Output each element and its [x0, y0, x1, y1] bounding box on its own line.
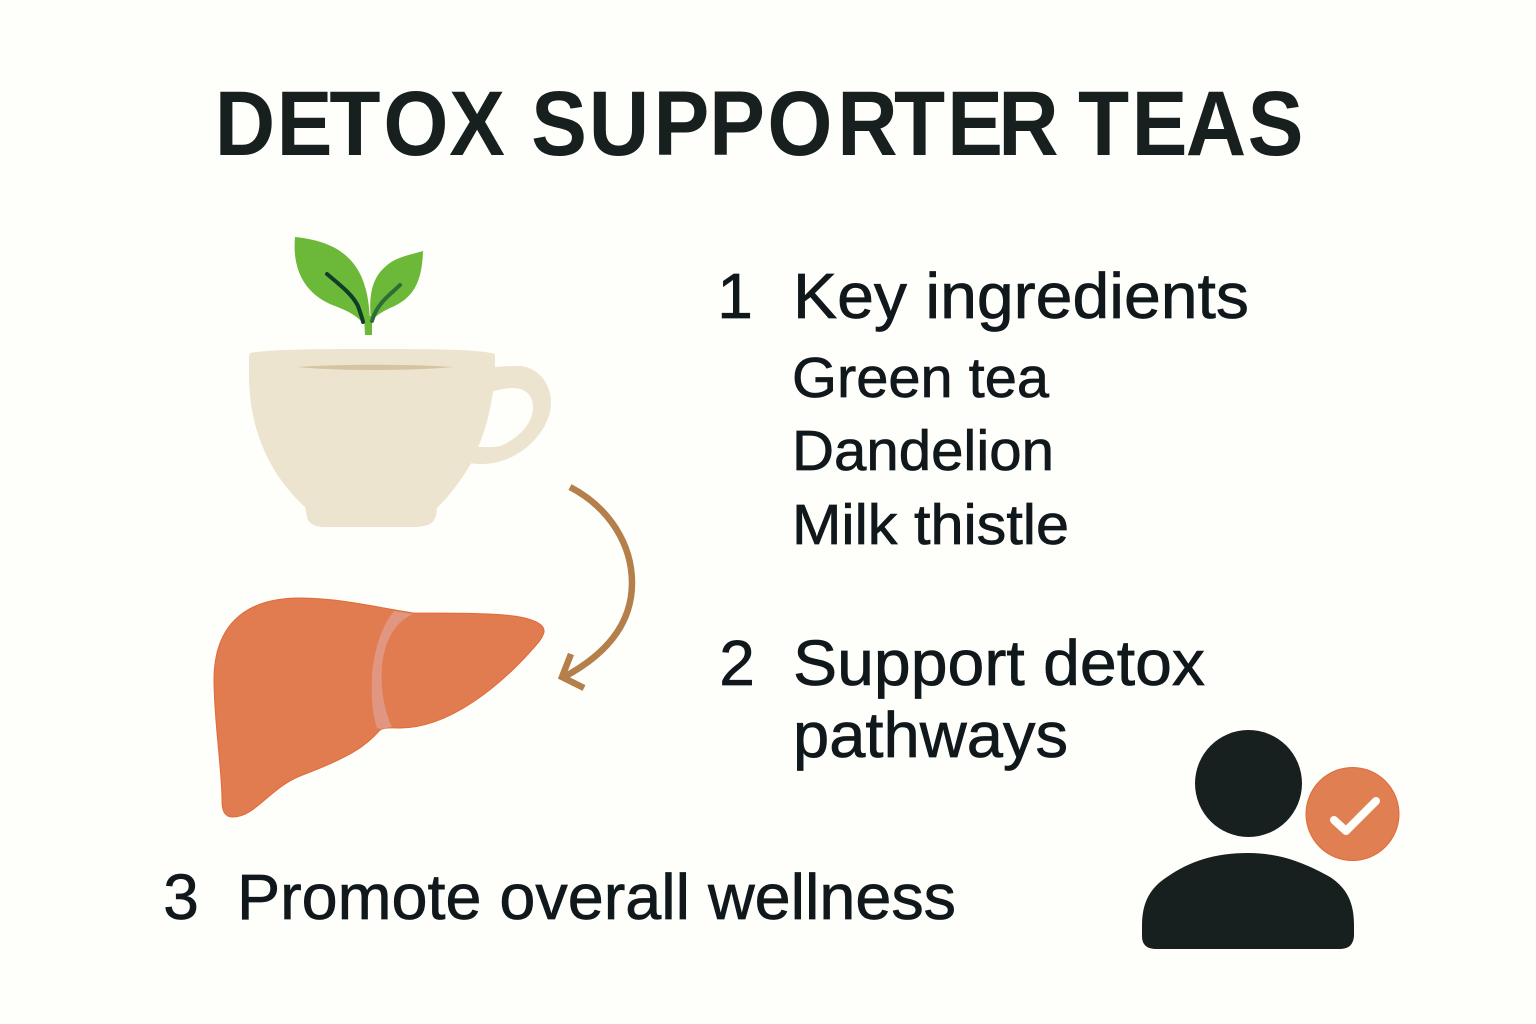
icon: liver ligament: [372, 611, 413, 729]
number 3: 3: [163, 861, 199, 933]
ingredient: green tea: Green tea: [792, 346, 1049, 410]
title: DETOX SUPPORTER TEAS: [215, 71, 1303, 175]
icon: right leaf vein: [372, 285, 400, 321]
icon: liver: [214, 598, 544, 817]
icon: cup body: [249, 349, 495, 527]
icon: leaf stem: [364, 316, 372, 335]
icon: person body: [1142, 853, 1354, 949]
list item 2: [719, 627, 1205, 771]
icon: person with check badge: [1142, 730, 1399, 949]
icon: cup handle: [464, 366, 551, 464]
icon: left leaf: [295, 237, 370, 323]
icon: left leaf vein: [327, 274, 363, 322]
icon: check badge: [1306, 768, 1399, 860]
number 2: 2: [719, 627, 755, 699]
icon: tea surface: [297, 365, 453, 370]
heading: key ingredients: Key ingredients: [793, 260, 1249, 332]
text: support detox pathways: Support detox: [793, 627, 1205, 699]
list item 3: [163, 861, 956, 933]
icon: tea cup with leaves: [249, 237, 551, 527]
icon: person head: [1195, 730, 1302, 837]
icon: check mark: [1334, 801, 1376, 831]
icon: right leaf: [370, 251, 423, 322]
arrow: cup to liver: [562, 487, 632, 688]
ingredient: dandelion: Dandelion: [792, 419, 1054, 483]
number 1: 1: [717, 260, 753, 332]
text: support detox pathways: pathways: [793, 699, 1068, 771]
text: promote overall wellness: Promote overall wellness: [237, 861, 956, 933]
list item 1: [717, 260, 1249, 557]
ingredient: milk thistle: Milk thistle: [792, 493, 1069, 557]
